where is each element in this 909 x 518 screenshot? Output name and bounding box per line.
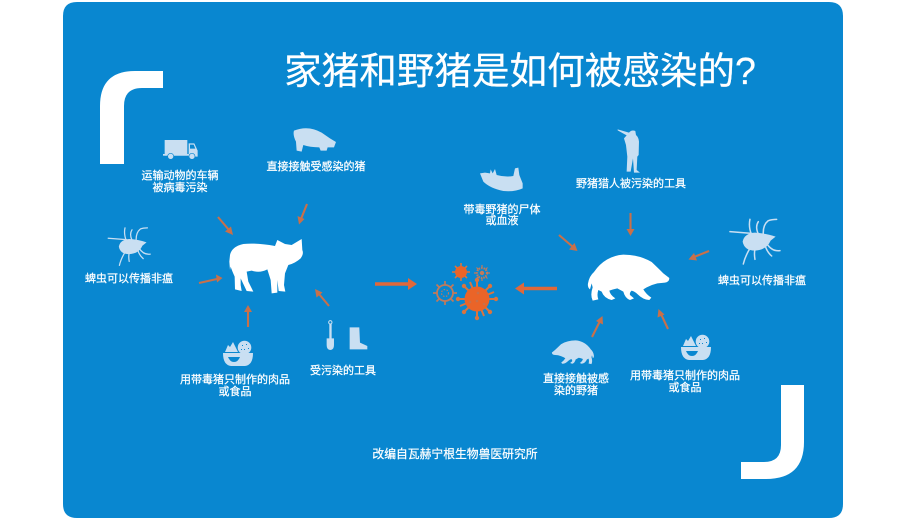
label: truck	[142, 168, 218, 194]
icon: hunter	[618, 129, 640, 173]
icon: tick left	[108, 228, 150, 265]
icon: small wild boar	[552, 340, 594, 364]
label: food left	[180, 372, 290, 398]
pig: domestic	[229, 239, 303, 293]
label: tick right: 蜱虫可以传播非瘟	[718, 273, 806, 287]
arrows: into wild boar	[559, 213, 709, 337]
label: carcass	[464, 202, 540, 227]
corner bracket: bottom right	[741, 385, 804, 479]
virus: large orange	[456, 278, 498, 320]
virus: outline	[433, 281, 457, 305]
icon: truck	[163, 140, 198, 159]
arrow: boar to virus	[515, 282, 557, 294]
label: truck: 运输动物的车辆	[142, 168, 218, 182]
wild boar	[588, 255, 669, 301]
icon: infected pig	[294, 128, 336, 152]
label: hunter: 野猪猎人被污染的工具	[576, 176, 686, 190]
label: tools: 受污染的工具	[310, 363, 376, 377]
label: tick left: 蜱虫可以传播非瘟	[85, 271, 173, 285]
label: food right: 或食品	[668, 380, 702, 394]
label: infected boar: 染的野猪	[554, 383, 598, 397]
label: infected boar: 直接接触被感	[543, 371, 609, 385]
title: 家猪和野猪是如何被感染的?	[284, 50, 756, 92]
icon: food bowl left	[223, 341, 253, 366]
virus cluster	[433, 263, 498, 320]
arrows: into domestic pig	[199, 204, 329, 327]
icon: shovel and boot	[327, 321, 367, 350]
label: carcass: 带毒野猪的尸体	[464, 202, 540, 216]
icon: tick right	[730, 219, 780, 264]
icon: boar carcass	[480, 168, 523, 191]
corner bracket: top left	[100, 71, 163, 164]
icon: food bowl right	[681, 335, 711, 360]
label: food right: 用带毒猪只制作的肉品	[630, 368, 740, 382]
label: infected pig: 直接接触受感染的猪	[266, 159, 366, 173]
arrow: domestic pig to virus	[375, 278, 417, 290]
virus: small orange	[452, 263, 470, 281]
label: infected boar	[543, 371, 609, 397]
label: truck: 被病毒污染	[152, 180, 208, 194]
label: carcass: 或血液	[486, 213, 518, 227]
virus: grey speckled	[474, 265, 490, 281]
label: food left: 或食品	[218, 384, 252, 398]
source credit: 改编自瓦赫宁根生物兽医研究所	[372, 447, 538, 461]
label: food left: 用带毒猪只制作的肉品	[180, 372, 290, 386]
label: food right	[630, 368, 740, 394]
